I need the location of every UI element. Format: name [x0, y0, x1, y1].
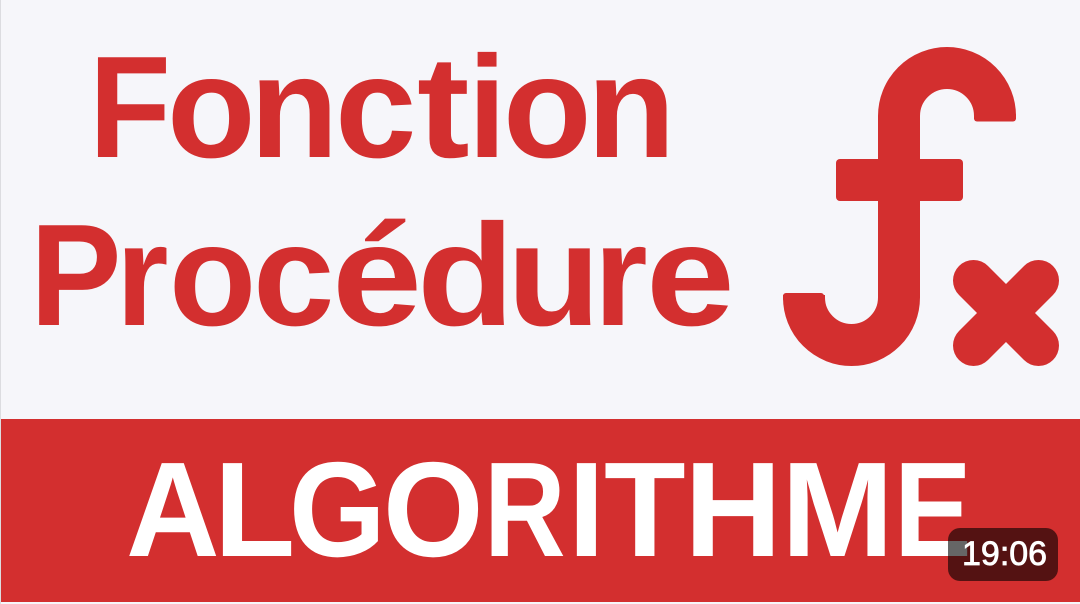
title: Procédure: d — [416, 194, 514, 356]
banner heading: ALGORITHME: M — [781, 434, 894, 585]
title: Procédure — [30, 194, 735, 356]
title: Procédure: é — [332, 194, 422, 356]
title: Procédure: e — [646, 194, 735, 356]
title: Fonction: n — [250, 26, 338, 188]
title: Fonction: o — [167, 26, 256, 188]
title: Fonction: n — [587, 26, 675, 188]
title: Fonction — [89, 26, 675, 188]
title: Procédure: P — [30, 194, 121, 356]
banner heading: ALGORITHME: A — [126, 434, 220, 585]
title: Procédure: u — [507, 194, 600, 356]
banner heading: ALGORITHME — [126, 434, 971, 585]
title: Fonction: c — [335, 26, 416, 188]
icon part: f stem with hooks — [804, 68, 995, 345]
banner heading: ALGORITHME: T — [604, 434, 686, 585]
icon part: f crossbar — [836, 159, 963, 201]
banner: red band — [1, 419, 1080, 602]
title: Fonction: o — [503, 26, 592, 188]
banner heading: ALGORITHME: E — [894, 434, 971, 585]
banner heading: ALGORITHME: R — [484, 434, 565, 585]
banner heading: ALGORITHME: G — [289, 434, 386, 585]
badge time: 19:06 — [962, 535, 1047, 573]
title: Procédure: r — [116, 194, 168, 356]
banner heading: ALGORITHME: L — [214, 434, 296, 585]
icon part: hook end bottom — [783, 293, 824, 302]
banner heading: ALGORITHME: I — [568, 434, 604, 585]
title: Procédure: r — [594, 194, 648, 356]
title: Fonction: i — [468, 26, 506, 188]
duration badge — [948, 528, 1058, 581]
title: Procédure: c — [253, 194, 334, 356]
icon part: x mark — [974, 280, 1038, 346]
banner heading: ALGORITHME: H — [684, 434, 782, 585]
icon part: hook end top — [974, 112, 1016, 122]
title: Fonction: t — [417, 26, 469, 188]
title: Procédure: o — [169, 194, 256, 356]
icon: function symbol fx — [783, 47, 1059, 366]
banner heading: ALGORITHME: O — [383, 434, 483, 585]
title: Fonction: F — [89, 26, 171, 188]
